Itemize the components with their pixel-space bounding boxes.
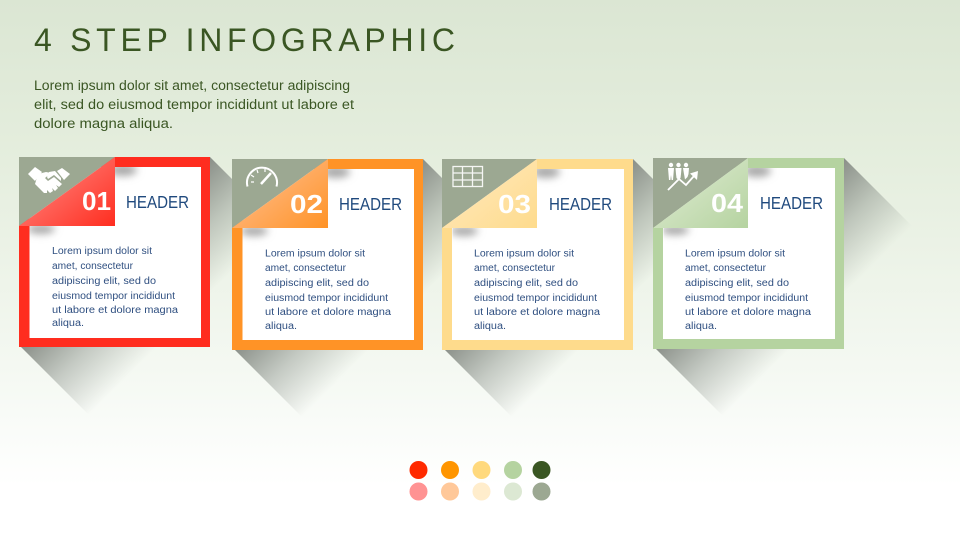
card frame	[442, 159, 633, 350]
grey corner	[442, 159, 537, 228]
step number: 02	[290, 189, 323, 219]
long shadows	[655, 158, 912, 416]
header: HEADER	[339, 194, 402, 214]
body text: eiusmod tempor incididunt	[265, 293, 388, 304]
colour palette dots	[410, 461, 550, 500]
body text: amet, consectetur	[52, 261, 134, 272]
colour fold	[232, 159, 328, 228]
body text: adipiscing elit, sed do	[265, 278, 369, 289]
body text: Lorem ipsum dolor sit	[265, 248, 365, 260]
body text: Lorem ipsum dolor sit	[474, 248, 574, 260]
body text: ut labore et dolore magna	[474, 307, 600, 318]
step number: 03	[498, 189, 531, 219]
header: HEADER	[549, 194, 612, 214]
card frame	[232, 159, 423, 350]
icon: table	[453, 166, 482, 186]
body text: eiusmod tempor incididunt	[52, 291, 175, 302]
body text: ut labore et dolore magna	[52, 305, 178, 316]
grey corner	[19, 157, 115, 226]
body text: ut labore et dolore magna	[685, 307, 811, 318]
panel: step 4	[653, 158, 912, 416]
body text	[474, 248, 600, 332]
body text: ut labore et dolore magna	[265, 307, 391, 318]
panel: step 2	[232, 159, 442, 411]
body text: amet, consectetur	[685, 263, 767, 274]
body text: amet, consectetur	[474, 263, 556, 274]
icon: people with rising arrow	[668, 163, 698, 190]
title: 4 STEP INFOGRAPHIC	[34, 22, 455, 58]
colour fold	[442, 159, 537, 228]
colour fold	[653, 158, 748, 228]
intro text block: Lorem ipsum dolor sit amet, consectetur adipiscing	[34, 78, 350, 93]
body text: aliqua.	[474, 321, 506, 332]
fold shadows	[240, 166, 350, 236]
panel: step 1	[19, 157, 232, 409]
card frame	[19, 157, 210, 347]
fold shadows	[661, 165, 771, 235]
step number: 01	[82, 186, 111, 216]
card frame	[653, 158, 844, 349]
body text: adipiscing elit, sed do	[685, 278, 789, 289]
body text: eiusmod tempor incididunt	[685, 293, 808, 304]
body text	[52, 246, 178, 329]
body text	[685, 248, 811, 332]
icon: handshake	[28, 167, 70, 193]
fold shadows	[450, 166, 560, 236]
long shadows	[21, 157, 278, 415]
body text: amet, consectetur	[265, 263, 347, 274]
body text: Lorem ipsum dolor sit	[685, 248, 785, 260]
step number: 04	[711, 188, 744, 218]
fold shadows	[27, 164, 137, 234]
panel: step 3	[442, 159, 653, 411]
header: HEADER	[760, 193, 823, 213]
grey corner	[653, 158, 748, 228]
grey corner	[232, 159, 328, 228]
body text: eiusmod tempor incididunt	[474, 293, 597, 304]
long shadows	[444, 159, 701, 417]
card inner	[452, 169, 624, 340]
intro text block	[34, 78, 354, 131]
card inner	[663, 168, 835, 339]
card inner	[30, 167, 201, 338]
body text: aliqua.	[685, 321, 717, 332]
long shadows	[234, 159, 491, 417]
card inner	[242, 169, 414, 340]
body text	[265, 248, 391, 332]
body text: aliqua.	[52, 318, 84, 329]
icon: gauge	[247, 168, 277, 186]
header: HEADER	[126, 192, 189, 212]
body text: adipiscing elit, sed do	[474, 278, 578, 289]
intro text block: dolore magna aliqua.	[34, 116, 173, 131]
body text: aliqua.	[265, 321, 297, 332]
intro text block: elit, sed do eiusmod tempor incididunt ut labore et	[34, 97, 354, 112]
body text: adipiscing elit, sed do	[52, 276, 156, 287]
colour fold	[19, 157, 115, 226]
body text: Lorem ipsum dolor sit	[52, 246, 152, 257]
